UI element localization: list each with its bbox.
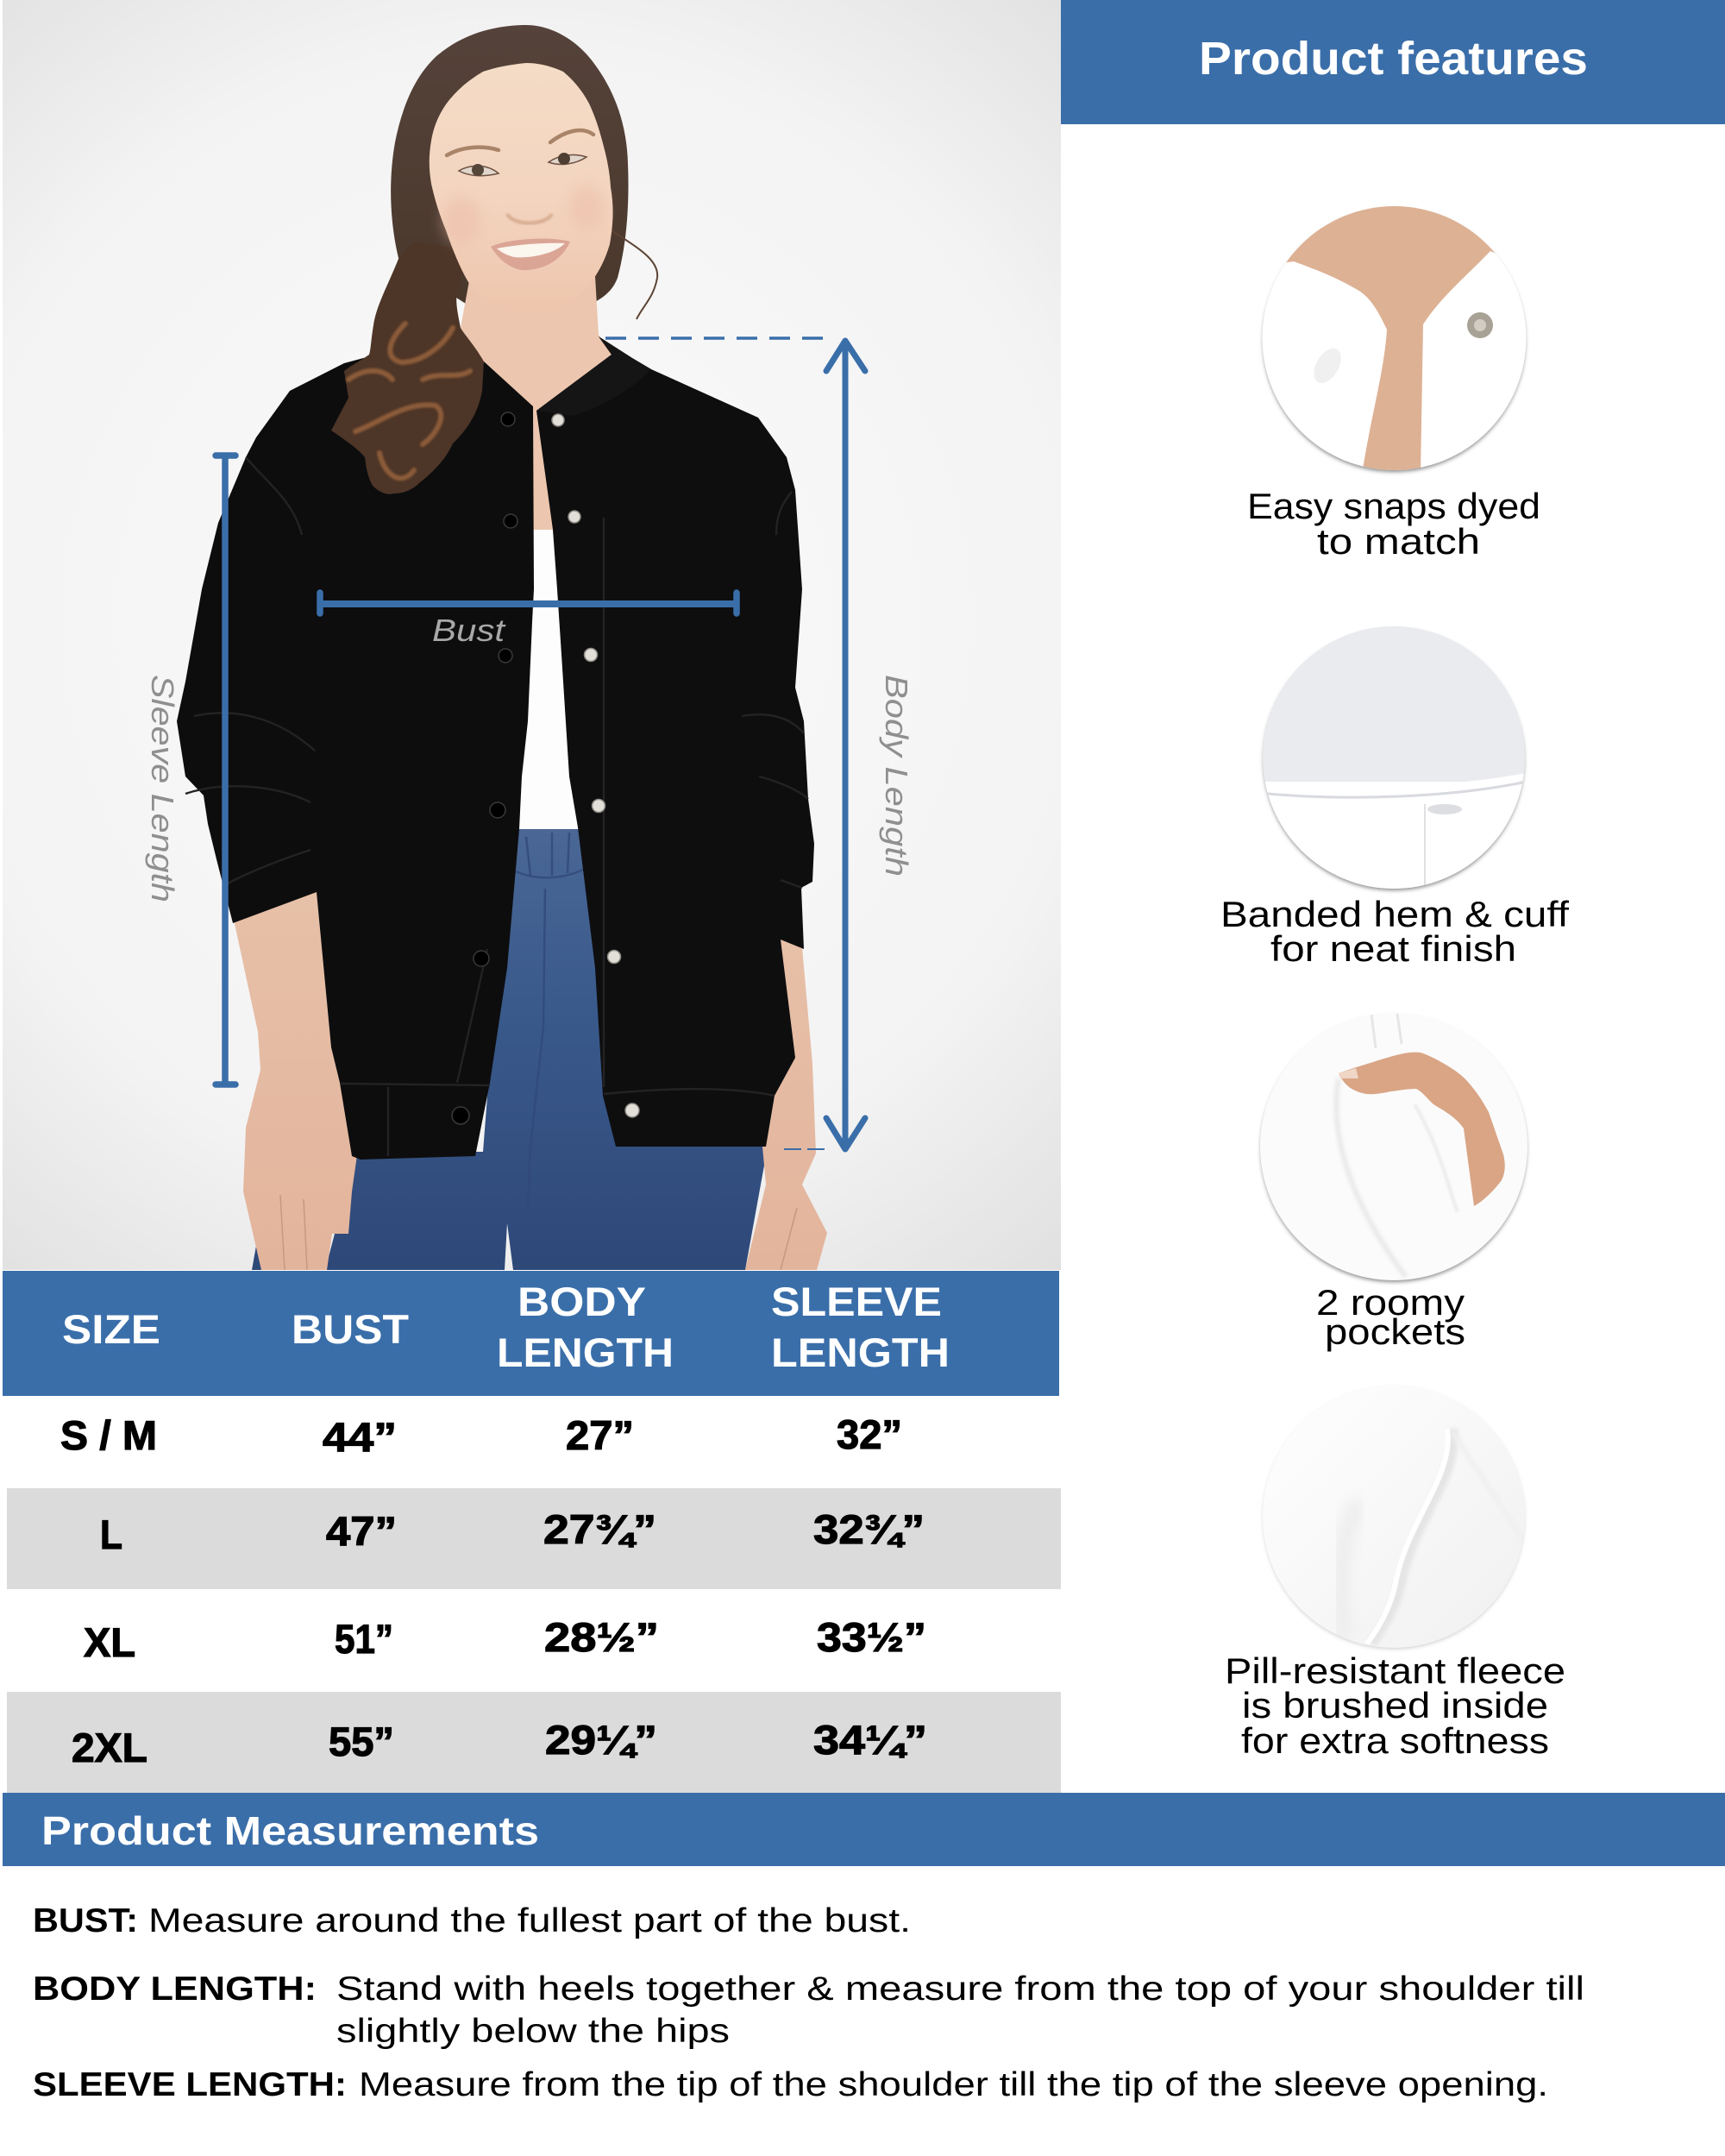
table header row: BUST [292, 1306, 409, 1352]
instruction: body length [33, 1971, 1584, 2050]
fingers [280, 1195, 797, 1270]
circle photo: pocket [1260, 1013, 1527, 1282]
label: bust: Bust [432, 613, 506, 648]
caption: banded hem [1220, 894, 1569, 969]
caption: pockets: 2 roomy [1316, 1282, 1465, 1323]
row: XL: 28½” [544, 1614, 659, 1660]
model figure [145, 25, 914, 1270]
row: XL: 33½” [817, 1614, 926, 1660]
bust guide [319, 593, 739, 613]
row: 2XL [7, 1692, 1061, 1793]
jacket left panel [177, 354, 534, 1160]
row: 2XL: 2XL [72, 1725, 147, 1770]
loose curl [609, 229, 657, 319]
sleeve length guide [216, 456, 235, 1084]
photo panel: model wearing black jacket with measurement guides [3, 0, 1061, 1270]
caption: banded hem: Banded hem & cuff [1220, 894, 1569, 934]
instruction: bust: Measure around the fullest part of the bust. [148, 1902, 911, 1939]
row: S/M: 32” [837, 1411, 902, 1457]
row: XL: 51” [335, 1616, 393, 1662]
circle photo: hem [1259, 626, 1535, 894]
mouth [491, 239, 570, 270]
caption: fleece: Pill-resistant fleece [1225, 1650, 1565, 1691]
hair back [391, 25, 628, 304]
heading: product measurements: Product Measurements [41, 1808, 539, 1853]
jacket collar right [536, 336, 651, 416]
instruction: sleeve length: Measure from the tip of the shoulder till the tip of the sleeve opening. [359, 2066, 1548, 2103]
cheek blush [442, 185, 604, 244]
row: S/M: 27” [566, 1412, 634, 1458]
eyes [459, 153, 586, 176]
heading: product measurements [3, 1793, 1725, 1866]
caption: pockets [1316, 1282, 1465, 1352]
row: L: 47” [326, 1508, 397, 1554]
caption: easy snaps [1247, 486, 1540, 562]
label: sleeve length: Sleeve Length [145, 675, 180, 902]
row: L [7, 1488, 1061, 1589]
caption: fleece: for extra softness [1241, 1720, 1549, 1761]
caption: easy snaps: Easy snaps dyed [1247, 486, 1540, 526]
body length guide arrow [605, 338, 865, 1149]
hair highlights [348, 324, 470, 478]
black snaps [452, 412, 518, 1124]
row: L: 27¾” [543, 1506, 656, 1552]
instruction: bust: BUST: [33, 1902, 138, 1939]
row: S/M [60, 1411, 902, 1460]
feature: fleece [1228, 1425, 1564, 1753]
circle photo: snaps [1260, 206, 1528, 475]
waistband folds [516, 833, 583, 1122]
jeans [325, 820, 768, 1270]
arms and hands [234, 890, 359, 1270]
instruction: body length: BODY LENGTH: [33, 1971, 317, 2008]
neck and chest [461, 276, 612, 535]
nose [507, 214, 552, 223]
label: body length: Body Length [879, 675, 914, 877]
row: 2XL: 55” [329, 1719, 394, 1764]
row: 2XL: 29¼” [545, 1717, 657, 1763]
row: XL [84, 1614, 926, 1665]
table header row: LENGTH [497, 1329, 674, 1375]
panel: product features header [1061, 0, 1725, 124]
feature: pockets [1260, 1013, 1527, 1352]
row: XL: XL [84, 1619, 135, 1665]
tank top [518, 530, 580, 829]
circle photo: fleece [1263, 1386, 1527, 1649]
row: S/M: 44” [323, 1414, 397, 1460]
brows [447, 130, 593, 155]
row: L: L [100, 1512, 122, 1557]
size table [3, 1271, 1061, 1793]
table header row [3, 1271, 1059, 1396]
instruction: sleeve length [33, 2066, 1548, 2103]
row: L: 32¾” [813, 1506, 925, 1552]
table header row: SIZE [62, 1306, 160, 1352]
caption: fleece: is brushed inside [1242, 1685, 1548, 1725]
jacket seams [185, 457, 808, 1156]
row: S/M: S / M [60, 1412, 157, 1458]
panel: product features header: Product features [1199, 33, 1588, 85]
jacket right panel [536, 336, 814, 1147]
instruction: sleeve length: SLEEVE LENGTH: [33, 2066, 347, 2103]
caption: fleece [1225, 1650, 1565, 1761]
table header row: BODY [518, 1279, 646, 1324]
instruction: body length: slightly below the hips [336, 2013, 730, 2050]
silver snaps [552, 414, 639, 1117]
caption: banded hem: for neat finish [1270, 928, 1516, 969]
caption: easy snaps: to match [1317, 521, 1480, 562]
caption: pockets: pockets [1325, 1311, 1465, 1352]
instruction: body length: Stand with heels together & measure from the top of your shoulder till [336, 1971, 1584, 2008]
feature: easy snaps [1247, 198, 1544, 562]
row: 2XL: 34¼” [813, 1717, 927, 1763]
table header row: SLEEVE [771, 1279, 942, 1324]
feature: banded hem [1220, 626, 1569, 969]
face [430, 63, 613, 283]
table header row: LENGTH [771, 1329, 950, 1375]
hair curl [331, 242, 484, 494]
text block: measurement instructions [33, 1902, 1584, 2103]
